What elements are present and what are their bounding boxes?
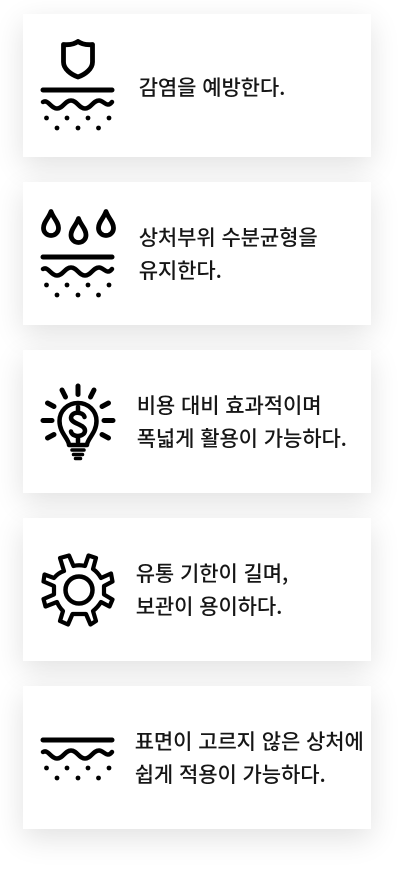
- text: cost effective: 폭넓게 활용이 가능하다.: [137, 422, 347, 452]
- panel: moisture balance: [23, 182, 371, 325]
- text: moisture balance: 상처부위 수분균형을: [139, 222, 318, 252]
- icon: light bulb with dollar sign: [43, 386, 113, 458]
- text: cost effective: 비용 대비 효과적이며: [137, 390, 321, 420]
- panel: uneven surfaces: [23, 686, 371, 829]
- icon: shield over skin: [43, 42, 112, 130]
- text: moisture balance: 유지한다.: [139, 254, 222, 284]
- text: uneven surfaces: 표면이 고르지 않은 상처에: [135, 726, 364, 756]
- text: long shelf life: 보관이 용이하다.: [136, 590, 282, 620]
- panel: cost effective: [23, 350, 371, 493]
- icon: gear: [44, 556, 112, 624]
- text: cost effective: [137, 390, 347, 452]
- text: prevents infection: 감염을 예방한다.: [139, 72, 285, 102]
- icon: skin layers: [43, 740, 112, 780]
- panel: prevents infection: [23, 14, 371, 157]
- text: uneven surfaces: [135, 726, 364, 788]
- text: moisture balance: [139, 222, 318, 284]
- text: uneven surfaces: 쉽게 적용이 가능하다.: [135, 758, 326, 788]
- panel: long shelf life: [23, 518, 371, 661]
- icon: water drops over skin: [43, 212, 114, 297]
- text: long shelf life: [136, 558, 288, 620]
- text: long shelf life: 유통 기한이 길며,: [136, 558, 288, 588]
